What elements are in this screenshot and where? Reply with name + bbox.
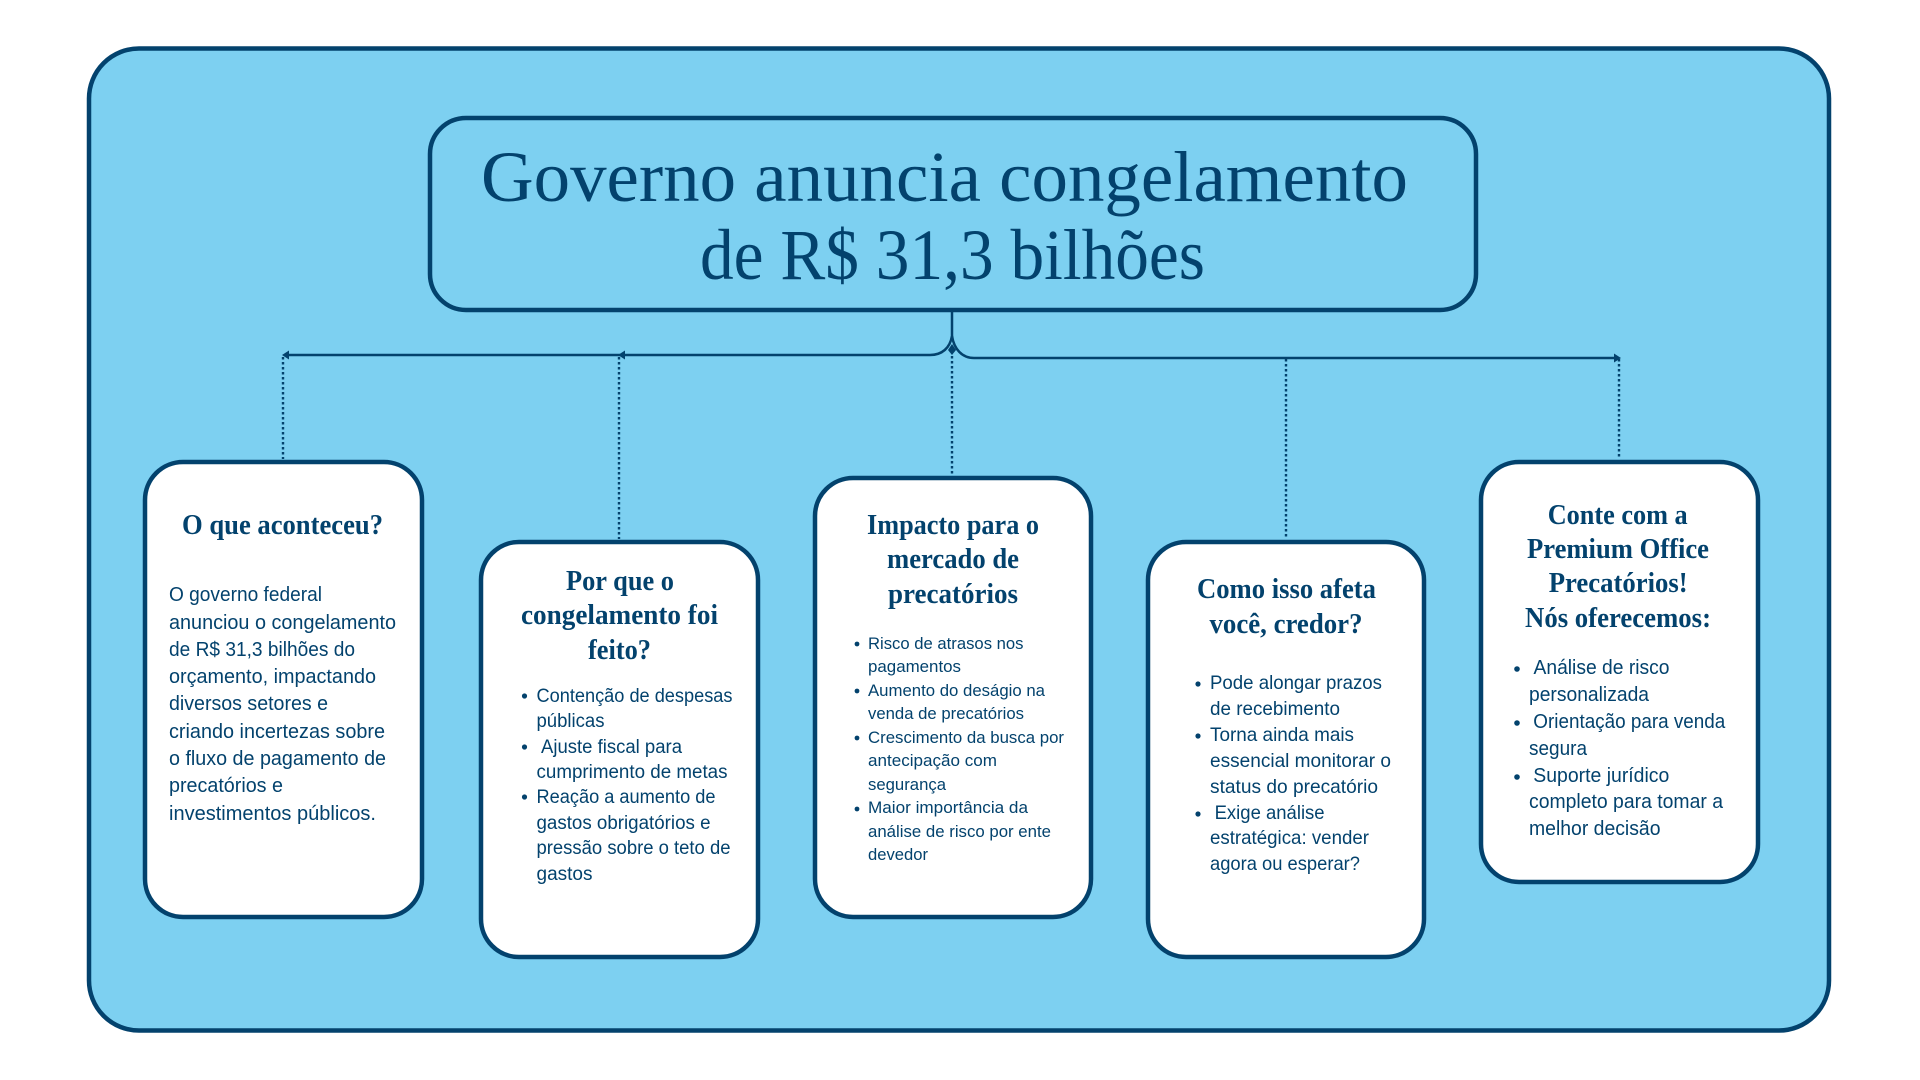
body text: investimentos públicos.	[169, 803, 376, 825]
body text: criando incertezas sobre	[169, 721, 385, 743]
bullet list: status do precatório	[1210, 776, 1378, 798]
bullet list: pagamentos	[868, 657, 961, 676]
body text: anunciou o congelamento	[169, 612, 396, 634]
panel: Por que o congelamento foi feito	[481, 542, 758, 957]
bullet list: Exige análise	[1215, 802, 1325, 824]
body text: O governo federal	[169, 584, 322, 606]
heading: Conte com a Premium Office Precatórios: Conte com a	[1548, 499, 1688, 531]
bullet list: Análise de risco	[1534, 657, 1670, 679]
bullet list: análise de risco por ente	[868, 822, 1051, 841]
panel: Impacto para o mercado de precatórios	[815, 478, 1091, 917]
bullet list: segura	[1529, 738, 1588, 760]
bullet list: essencial monitorar o	[1210, 750, 1391, 772]
heading: O que aconteceu: O que aconteceu?	[182, 509, 383, 541]
body text: diversos setores e	[169, 693, 328, 715]
body text	[169, 584, 396, 825]
bullet list	[1195, 672, 1391, 875]
heading: Conte com a Premium Office Precatórios	[1525, 499, 1711, 634]
bullet list: cumprimento de metas	[536, 762, 728, 783]
bullet list: Ajuste fiscal para	[541, 737, 682, 758]
bullet list	[1514, 657, 1726, 840]
bullet list	[855, 634, 1064, 864]
heading: Por que o congelamento foi feito: feito?	[588, 634, 651, 666]
panel: Como isso afeta você, credor	[1148, 542, 1424, 957]
heading: Como isso afeta você, credor: Como isso afeta	[1197, 573, 1376, 605]
title text: de R$ 31,3 bilhões	[700, 215, 1205, 295]
heading: Como isso afeta você, credor: você, credor?	[1210, 608, 1362, 640]
bullet list: venda de precatórios	[868, 704, 1024, 723]
bullet list: antecipação com	[868, 751, 997, 770]
bullet list: Orientação para venda	[1533, 711, 1726, 733]
body text: de R$ 31,3 bilhões do	[169, 639, 355, 661]
bullet list: de recebimento	[1210, 698, 1340, 720]
bullet list: completo para tomar a	[1529, 791, 1724, 813]
bullet list: Reação a aumento de	[536, 787, 716, 808]
heading: Conte com a Premium Office Precatórios: Premium Office	[1527, 533, 1709, 565]
bullet list: gastos	[536, 864, 592, 885]
heading: Impacto para o mercado de precatórios: mercado de	[887, 543, 1019, 575]
bullet list: Suporte jurídico	[1533, 765, 1669, 787]
heading: Conte com a Premium Office Precatórios: Nós oferecemos:	[1525, 602, 1711, 634]
bullet list: devedor	[868, 845, 928, 864]
bullet list: segurança	[868, 775, 947, 794]
bullet list: Maior importância da	[868, 798, 1029, 817]
heading: Impacto para o mercado de precatórios	[867, 509, 1039, 610]
panel: Conte com a Premium Office Precatórios	[1481, 462, 1758, 882]
bullet list: pressão sobre o teto de	[536, 838, 730, 859]
body text: o fluxo de pagamento de	[169, 748, 386, 770]
panel: O que aconteceu	[145, 462, 422, 917]
bullet list: estratégica: vender	[1210, 827, 1369, 849]
bullet list	[522, 686, 732, 885]
heading: Por que o congelamento foi feito: congelamento foi	[521, 599, 718, 631]
title box	[430, 118, 1476, 310]
bullet list: Aumento do deságio na	[868, 681, 1046, 700]
body text: orçamento, impactando	[169, 666, 376, 688]
bullet list: personalizada	[1529, 684, 1650, 706]
heading: Por que o congelamento foi feito: Por que o	[566, 565, 674, 597]
heading: Conte com a Premium Office Precatórios: Precatórios!	[1549, 567, 1688, 599]
body text: precatórios e	[169, 775, 283, 797]
bullet list: Torna ainda mais	[1210, 724, 1354, 746]
heading: Como isso afeta você, credor	[1197, 573, 1376, 640]
connector arrows from title to cards	[282, 311, 1621, 539]
bullet list: Risco de atrasos nos	[868, 634, 1024, 653]
bullet list: gastos obrigatórios e	[536, 813, 710, 834]
bullet list: Contenção de despesas	[536, 686, 732, 707]
bullet list: públicas	[536, 711, 604, 732]
heading: Por que o congelamento foi feito	[521, 565, 718, 666]
title text: Governo anuncia congelamento	[481, 137, 1408, 217]
title text	[481, 137, 1408, 295]
bullet list: Crescimento da busca por	[868, 728, 1064, 747]
bullet list: agora ou esperar?	[1210, 853, 1360, 875]
bullet list: Pode alongar prazos	[1210, 672, 1382, 694]
heading: Impacto para o mercado de precatórios: Impacto para o	[867, 509, 1039, 541]
heading: Impacto para o mercado de precatórios: precatórios	[888, 578, 1018, 610]
bullet list: melhor decisão	[1529, 818, 1660, 840]
